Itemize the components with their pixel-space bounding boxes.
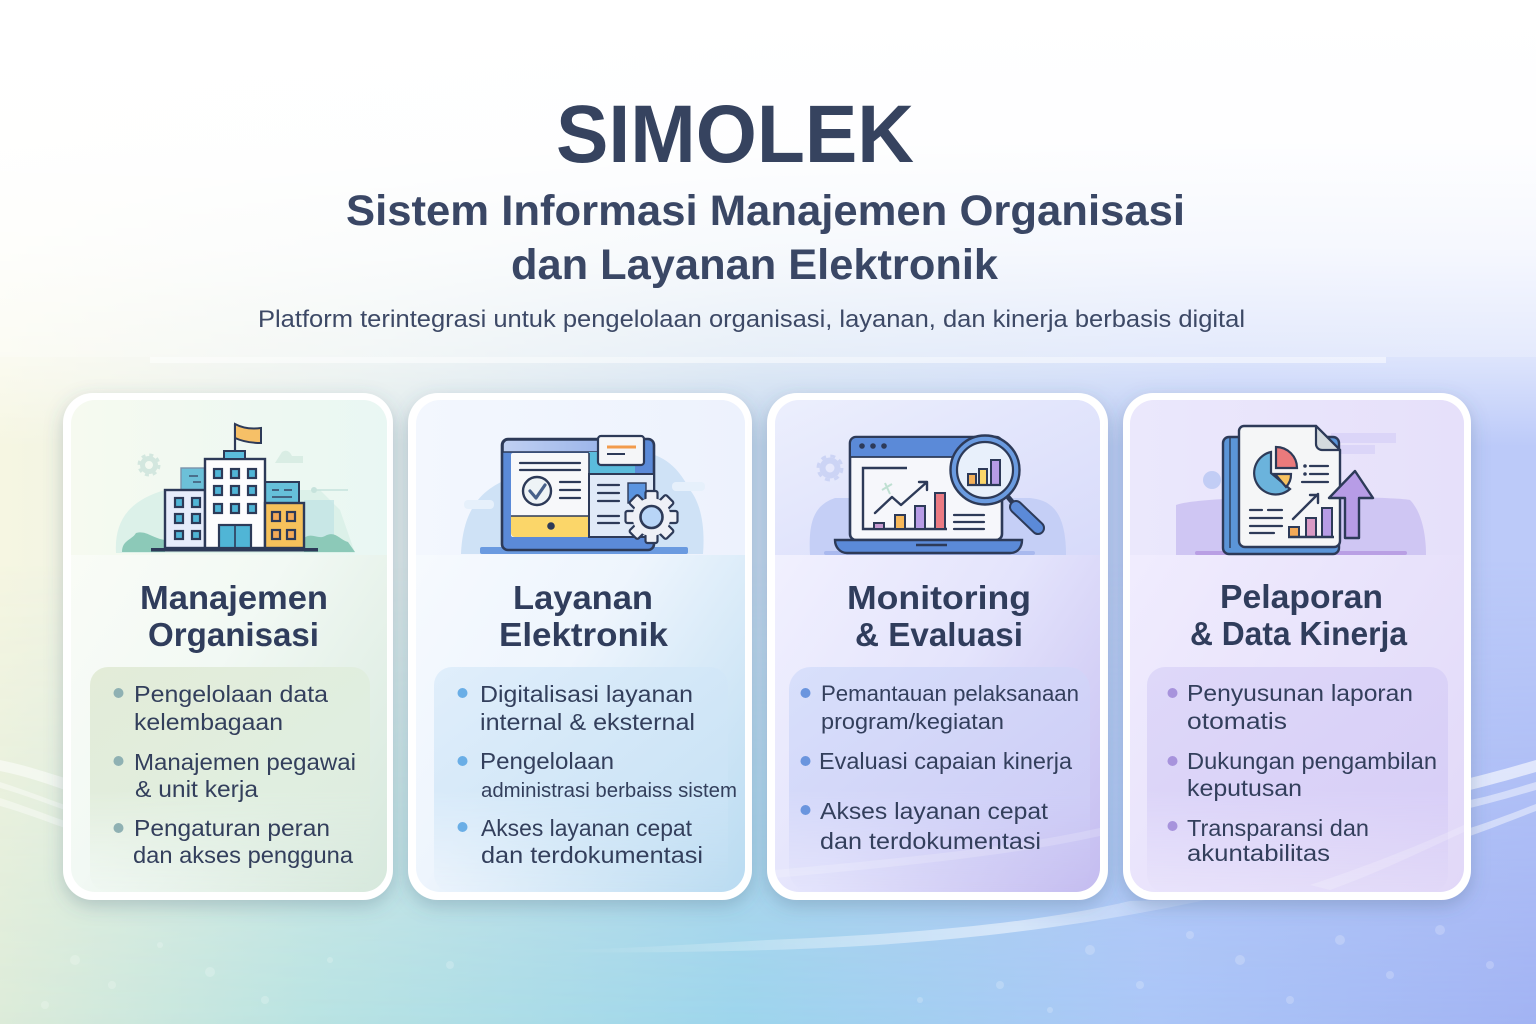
bullet: dukungan pengambilan: keputusan bbox=[1187, 775, 1302, 801]
subtitle bbox=[346, 187, 1185, 289]
panel: pelaporan dan data kinerja bbox=[1123, 393, 1471, 900]
panel: manajemen organisasi bbox=[63, 393, 393, 900]
heading: Layanan bbox=[513, 579, 653, 616]
heading: & Data Kinerja bbox=[1190, 615, 1408, 652]
bullet: transparansi: akuntabilitas bbox=[1187, 840, 1330, 866]
bullet: pengelolaan data: Pengelolaan data bbox=[134, 681, 328, 707]
bullet: digitalisasi layanan: Digitalisasi layanan bbox=[480, 681, 693, 707]
heading: & Evaluasi bbox=[855, 616, 1023, 653]
bullet: akses layanan: dan terdokumentasi bbox=[820, 828, 1041, 854]
bullet: dukungan pengambilan: Dukungan pengambilan bbox=[1187, 748, 1437, 774]
subtitle: Sistem Informasi Manajemen Organisasi bbox=[346, 187, 1185, 235]
feature list bbox=[434, 667, 736, 863]
card frame bbox=[408, 393, 752, 900]
feature list bbox=[789, 667, 1100, 854]
bullet: pemantauan bbox=[800, 681, 1079, 734]
heading bbox=[847, 579, 1031, 653]
subtitle: dan Layanan Elektronik bbox=[511, 241, 998, 289]
bullet: transparansi bbox=[1168, 815, 1369, 866]
bullet: evaluasi: Evaluasi capaian kinerja bbox=[819, 748, 1072, 774]
tagline: Platform terintegrasi untuk pengelolaan organisasi, layanan, dan kinerja berbasis digital bbox=[258, 306, 1245, 333]
bullet: pengaturan peran: Pengaturan peran bbox=[134, 815, 330, 841]
bullet: penyusunan laporan: otomatis bbox=[1187, 708, 1287, 734]
heading bbox=[140, 579, 328, 653]
bullet: pengelolaan administrasi: Pengelolaan bbox=[480, 748, 614, 774]
icon: report document bbox=[1130, 400, 1464, 555]
card frame bbox=[63, 393, 393, 900]
bullet: pengelolaan data: kelembagaan bbox=[134, 709, 283, 735]
bullet: manajemen pegawai: & unit kerja bbox=[135, 776, 258, 802]
heading: Elektronik bbox=[499, 616, 669, 653]
card body bbox=[1130, 400, 1464, 892]
bullet: transparansi: Transparansi dan bbox=[1187, 815, 1369, 841]
bullet: digitalisasi layanan: internal & eksternal bbox=[480, 709, 695, 735]
bullet: akses layanan: dan terdokumentasi bbox=[481, 842, 703, 868]
bullet: manajemen pegawai bbox=[114, 749, 356, 802]
card body bbox=[71, 400, 387, 892]
heading: Organisasi bbox=[148, 616, 319, 653]
heading: Monitoring bbox=[847, 579, 1031, 616]
feature list bbox=[90, 667, 370, 868]
background bbox=[0, 227, 1536, 1024]
feature list bbox=[1147, 667, 1448, 861]
card frame bbox=[1123, 393, 1471, 900]
bullet: pengelolaan administrasi: administrasi berbaiss sistem bbox=[481, 780, 737, 802]
bullet: pengelolaan data bbox=[114, 681, 328, 735]
bullet: penyusunan laporan bbox=[1168, 680, 1413, 734]
icon: office building bbox=[71, 400, 387, 555]
title: SIMOLEK bbox=[556, 89, 914, 180]
bullet: digitalisasi layanan bbox=[458, 681, 695, 735]
panel: layanan elektronik bbox=[408, 393, 752, 900]
bullet: akses layanan: Akses layanan cepat bbox=[820, 798, 1049, 824]
card body bbox=[416, 400, 745, 892]
heading bbox=[1190, 578, 1408, 652]
bullet: pengaturan peran bbox=[114, 815, 353, 868]
bullet: akses layanan: Akses layanan cepat bbox=[481, 815, 693, 841]
bullet: pengelolaan administrasi bbox=[458, 748, 737, 802]
card frame bbox=[767, 393, 1108, 900]
heading bbox=[499, 579, 669, 653]
heading: Pelaporan bbox=[1220, 578, 1383, 615]
bullet: akses layanan bbox=[800, 798, 1049, 854]
bullet: pengaturan peran: dan akses pengguna bbox=[133, 842, 353, 868]
bullet: penyusunan laporan: Penyusunan laporan bbox=[1187, 680, 1413, 706]
bullet: pemantauan: Pemantauan pelaksanaan bbox=[821, 681, 1079, 706]
icon: laptop with magnifier bbox=[775, 400, 1100, 555]
bullet: dukungan pengambilan bbox=[1168, 748, 1437, 801]
heading: Manajemen bbox=[140, 579, 328, 616]
card body bbox=[775, 400, 1100, 892]
bullet: pemantauan: program/kegiatan bbox=[821, 709, 1004, 734]
bullet: akses layanan bbox=[458, 815, 703, 868]
icon: service tablet and gear bbox=[416, 400, 745, 555]
bullet: manajemen pegawai: Manajemen pegawai bbox=[134, 749, 356, 775]
panel: monitoring dan evaluasi bbox=[767, 393, 1108, 900]
